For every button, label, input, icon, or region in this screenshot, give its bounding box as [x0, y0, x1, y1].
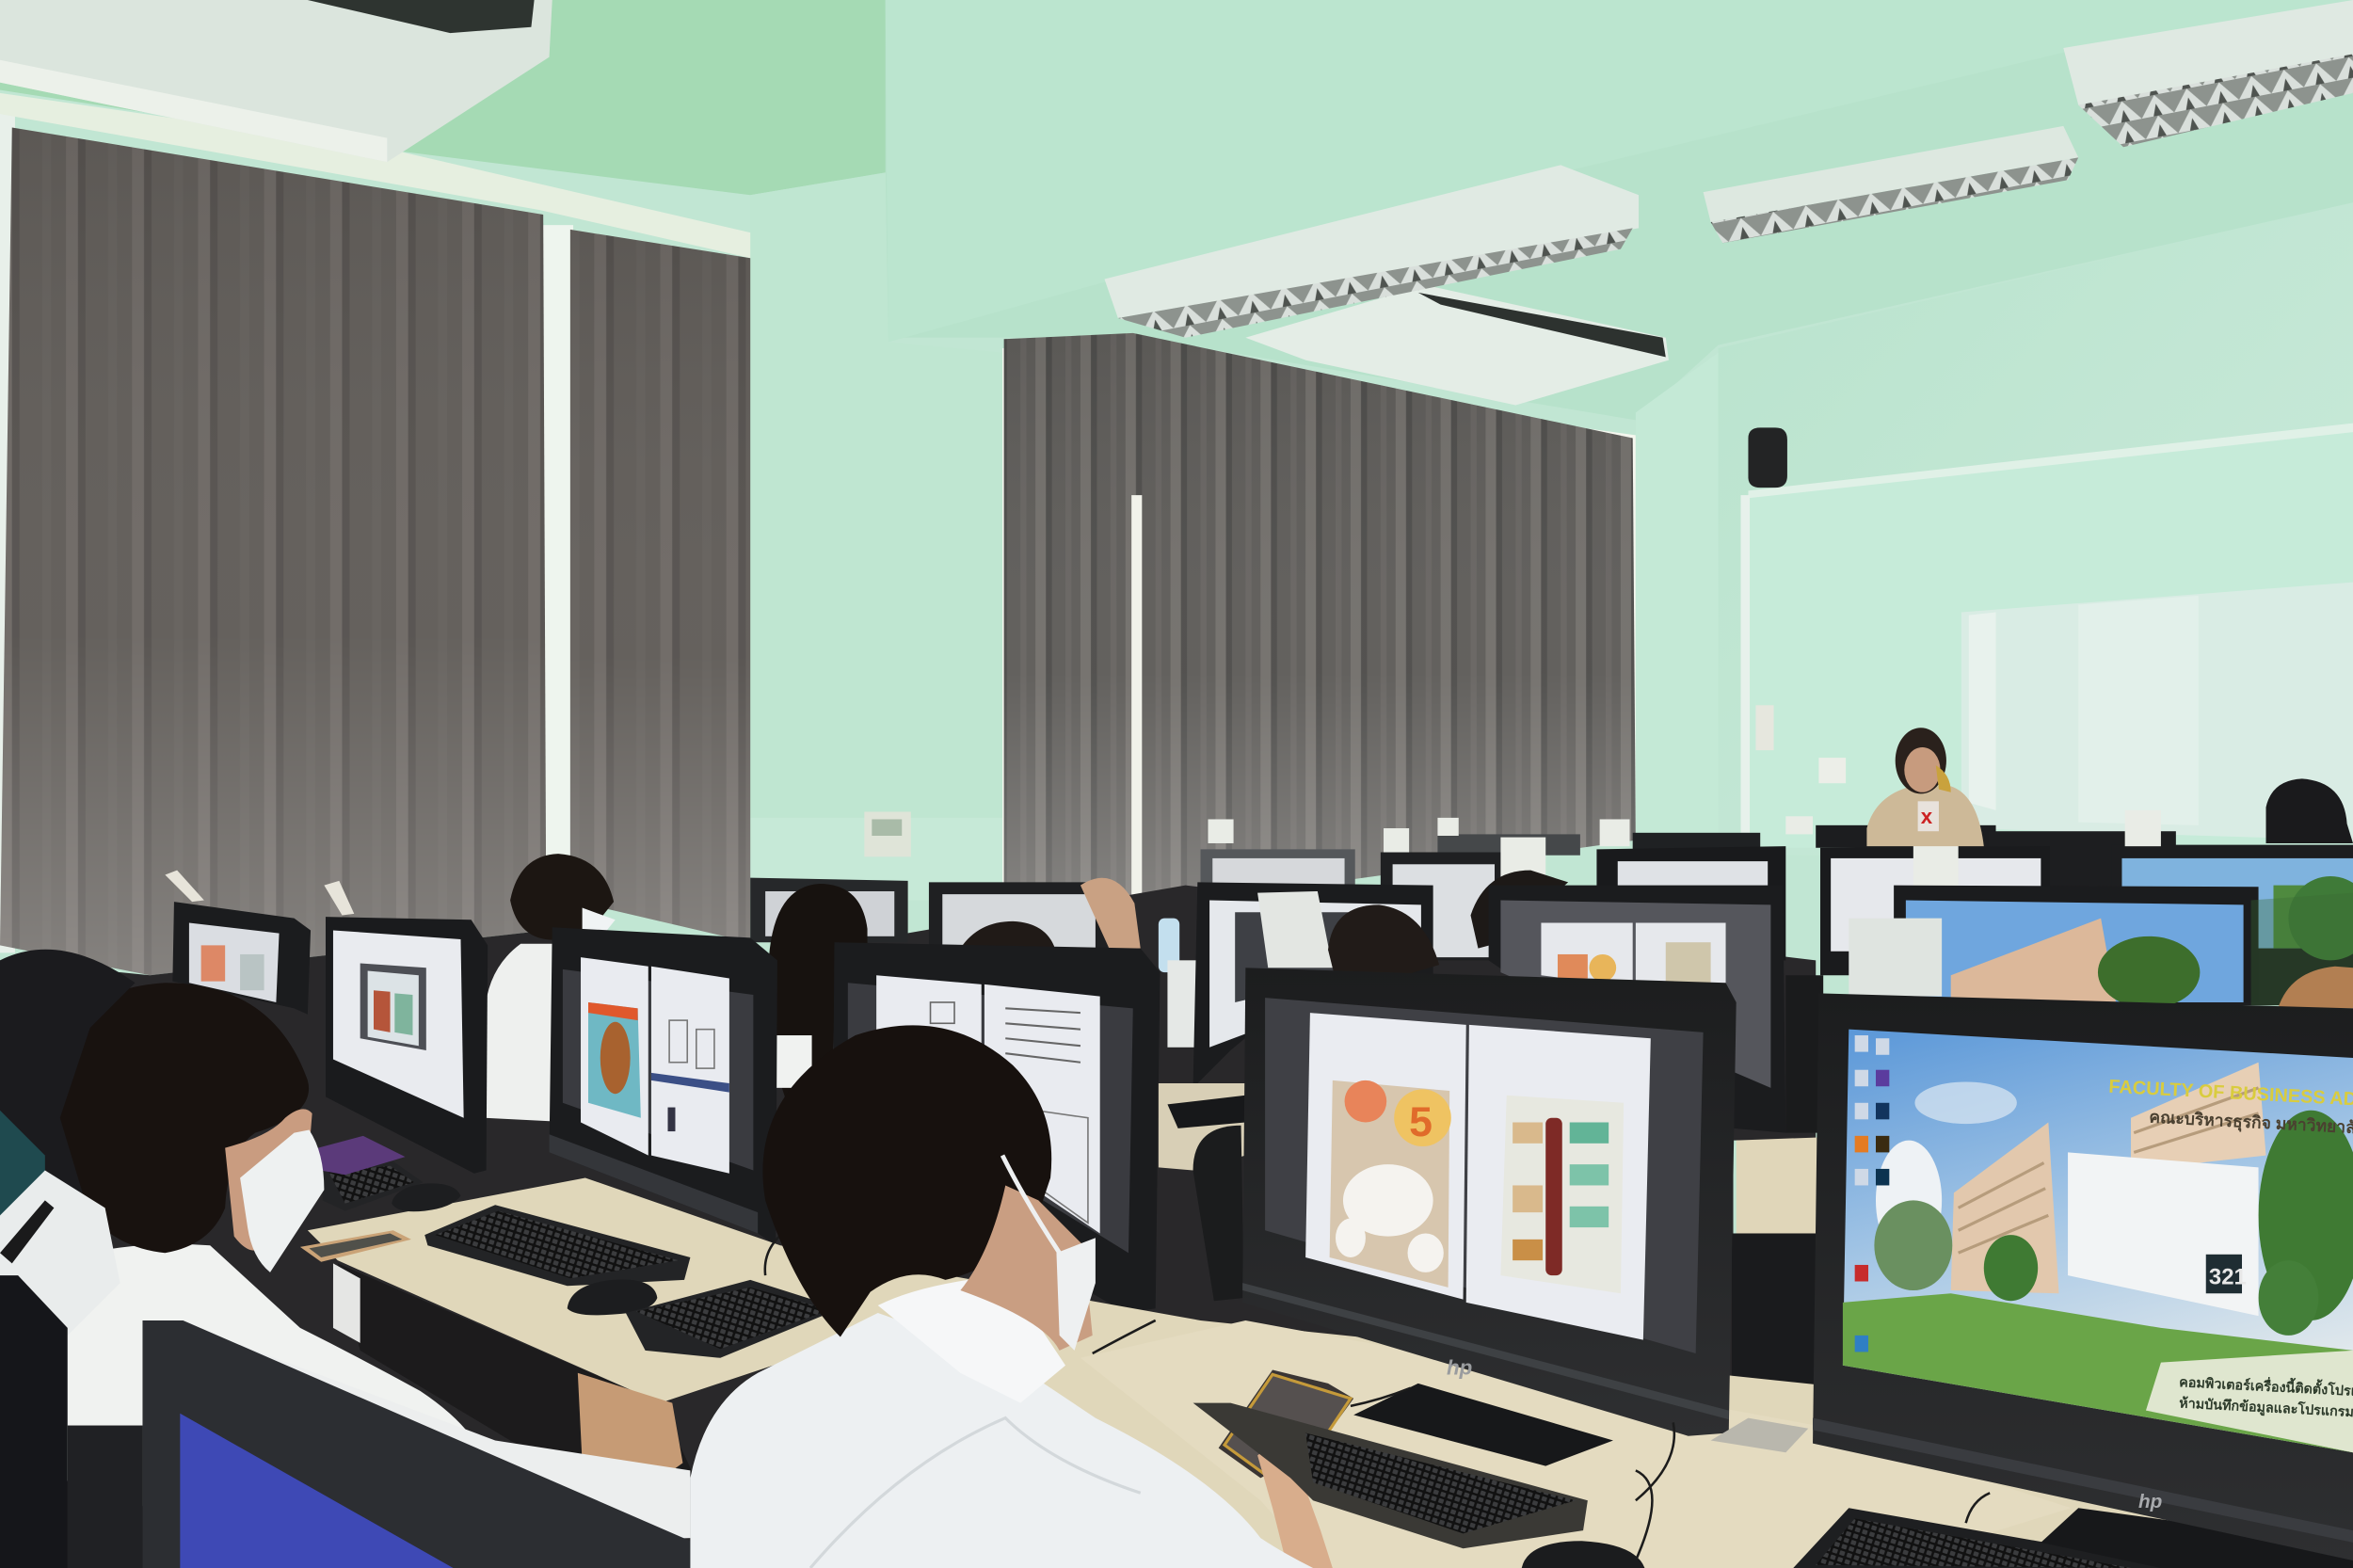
central ceiling light fixture [1104, 165, 1639, 338]
left window strip [540, 225, 573, 863]
top-right light fixture [2063, 0, 2353, 147]
left air conditioner [0, 0, 552, 162]
keyboard left [424, 1205, 690, 1286]
right monitor with wallpaper: hp [2138, 1491, 2162, 1512]
centre window light [1002, 348, 1636, 886]
wall: between curtains [750, 172, 1008, 886]
mouse left [568, 1280, 657, 1315]
ceiling [0, 0, 931, 195]
front student back view [690, 1025, 1334, 1568]
paper notes at left [165, 871, 354, 915]
whiteboard [1961, 583, 2353, 840]
mouse behind [392, 1183, 460, 1211]
right monitor with wallpaper: 321 [2209, 1265, 2247, 1290]
keyboard centre [626, 1280, 840, 1358]
main monitor with book spread: hp [1447, 1355, 1472, 1379]
girl with teal hair left [0, 950, 135, 1358]
rear desk strip [1159, 975, 1823, 1233]
under desk dark area [338, 1263, 705, 1500]
front mouse [1522, 1541, 1644, 1568]
skin leg [578, 1373, 682, 1500]
dark chair [1193, 1126, 1244, 1301]
monitor 2 with book preview [326, 917, 488, 1174]
central air conditioner [1245, 285, 1669, 405]
left curtain [0, 128, 546, 975]
right desk surface [1080, 1320, 2071, 1568]
mid row: monitor at left rear [172, 902, 311, 1015]
main monitor with book spread: 5 [1409, 1099, 1433, 1145]
blond hair far right [2278, 967, 2353, 1008]
wall: lower left strip [750, 818, 1008, 901]
centre divider under monitor [1732, 1233, 1822, 1414]
monitor 4 behind front student [833, 942, 1160, 1313]
keyboard behind [323, 1161, 424, 1211]
presenter: x [1921, 805, 1933, 828]
rear seated student [485, 854, 616, 1123]
ceiling right [886, 0, 2353, 420]
right monitor stand [2041, 1508, 2353, 1568]
left window ledge [0, 93, 750, 258]
rear row monitors centre [750, 878, 1108, 952]
main monitor stand [1353, 1384, 1613, 1466]
front-left monitor back [0, 1275, 735, 1568]
student near window [1080, 878, 1197, 1048]
right monitor with wallpaper [1813, 993, 2353, 1560]
desk legs [333, 1263, 360, 1343]
centre curtain [1004, 333, 1636, 915]
front left student with mask [15, 983, 480, 1533]
wall controls [864, 705, 1846, 856]
front right keyboard [1793, 1508, 2191, 1568]
person far right [2266, 778, 2353, 843]
far right wallpaper monitor [1849, 876, 2353, 1008]
main keyboard [1193, 1403, 1588, 1548]
dark room floor and furniture behind desks [0, 886, 1816, 1568]
wall trim [1748, 424, 2353, 498]
main monitor with book spread [1242, 968, 1737, 1436]
ceiling light fixture [1704, 126, 2078, 243]
mid right monitor with infographic [1489, 886, 1785, 1133]
speaker [1748, 427, 1787, 488]
paper notes on monitors [1208, 810, 2161, 888]
presenter [1866, 728, 1984, 846]
phone in hand [1219, 1370, 1353, 1568]
main desk surface [308, 1177, 2353, 1568]
far-left window edge [0, 113, 15, 952]
monitor 3 with book spread [550, 927, 777, 1245]
far row monitors [1201, 825, 2353, 1005]
snack bag [312, 1136, 405, 1175]
mid rear monitor [1193, 871, 1568, 1088]
student with long hair [768, 884, 868, 1101]
conduit [1740, 495, 1750, 833]
right wall [1719, 202, 2353, 856]
cable tray [1711, 1418, 1808, 1452]
foreground sleeve [180, 1328, 690, 1541]
wall right of curtain [1636, 353, 1744, 840]
second left curtain [570, 230, 750, 942]
cables [765, 1230, 1990, 1560]
wall band below trim [1748, 427, 2353, 848]
ceiling beam [886, 0, 2353, 342]
phone on desk [300, 1230, 411, 1262]
